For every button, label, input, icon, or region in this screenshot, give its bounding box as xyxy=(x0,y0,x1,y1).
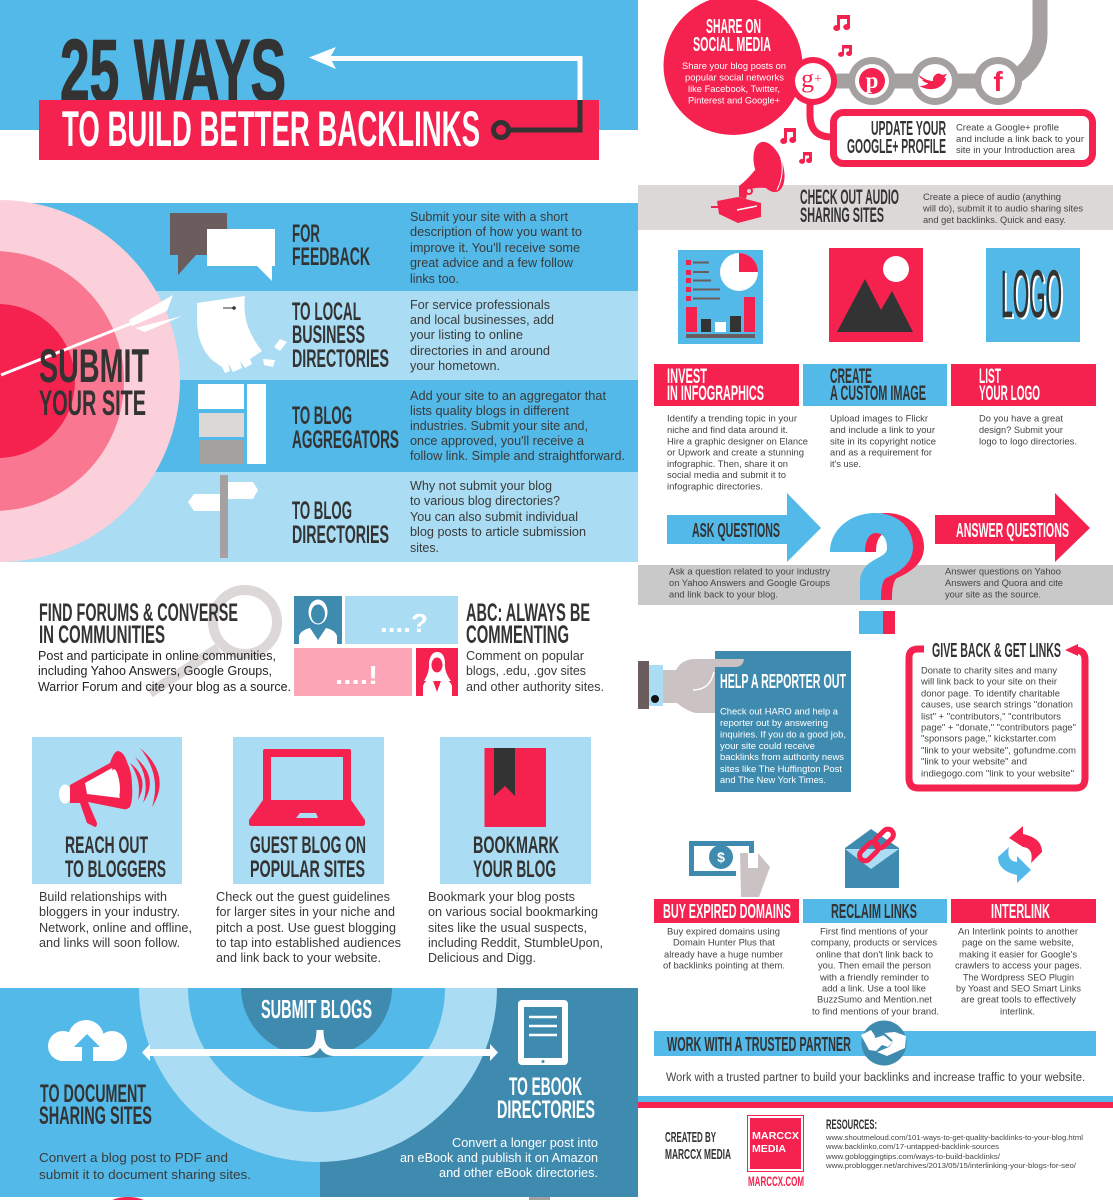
panel: buy expired domains: of backlinks pointing at them. xyxy=(663,960,785,972)
panel: reach out to bloggers: bloggers in your industry. xyxy=(39,904,180,919)
arrow: double brace xyxy=(142,1030,498,1061)
frame with arrow xyxy=(909,644,1085,788)
resources: www.gobloggingtips.com/ways-to-build-backlinks/ xyxy=(825,1152,1001,1161)
icon: facebook: f xyxy=(993,66,1003,97)
row: blog aggregators: AGGREGATORS xyxy=(292,426,399,454)
footer stripes xyxy=(638,1096,1113,1108)
panel: give back and get links: page" + "donate," "contributors page" xyxy=(921,722,1076,734)
icon: pinterest: p xyxy=(866,68,878,93)
icon: megaphone xyxy=(59,748,160,827)
panel: interlink: interlink. xyxy=(1000,1006,1035,1018)
row: local business directories: your hometown. xyxy=(410,358,500,373)
panel: guest blog: POPULAR SITES xyxy=(250,856,365,883)
red circle: Share your blog posts on xyxy=(682,61,786,72)
row: for feedback xyxy=(292,209,582,286)
concentric arcs xyxy=(139,988,497,1162)
panel: give back and get links: indiegogo.com "link to your website" xyxy=(921,768,1074,780)
panel: audio sharing: and get backlinks. Quick and easy. xyxy=(923,215,1066,226)
panel: help a reporter out: backlinks from authority news xyxy=(720,752,844,763)
row: local business directories: TO LOCAL xyxy=(292,298,361,326)
panel: guest blog: for larger sites in your niche and xyxy=(216,904,395,919)
icon: signpost xyxy=(188,475,258,558)
icon: logo tile xyxy=(986,248,1080,342)
title: 25 ways: 25 WAYS xyxy=(60,21,286,120)
panel: help a reporter out: sites like The Huffington Post xyxy=(720,764,842,775)
row: local business directories: For service professionals xyxy=(410,297,550,312)
icon: google plus: + xyxy=(814,72,822,87)
logo: marccx media: MARCCX xyxy=(752,1130,799,1142)
panel: find forums: including Yahoo Answers, Google Groups, xyxy=(38,663,272,678)
panel: bookmark: on various social bookmarking xyxy=(428,904,598,919)
panel: interlink: An Interlink points to another xyxy=(958,926,1078,938)
arrow: hitting target xyxy=(1,295,182,375)
panel: always be commenting: blogs, .edu, .gov sites xyxy=(466,663,586,678)
panel: reclaim links: RECLAIM LINKS xyxy=(831,901,917,923)
panel: reclaim links xyxy=(803,827,947,1018)
logo: marccx media xyxy=(748,1116,804,1189)
speech box: question xyxy=(345,596,458,644)
row: blog aggregators: industries. Submit your site and, xyxy=(410,418,588,433)
panel: guest blog: Check out the guest guidelines xyxy=(216,889,390,904)
panel: guest blog: and link back to your website. xyxy=(216,950,381,965)
icon: envelope with chain xyxy=(845,827,899,888)
panel: guest blog: to tap into established audiences xyxy=(216,935,401,950)
panel: interlink xyxy=(951,826,1096,1018)
panel: submit blogs: an eBook and publish it on Amazon xyxy=(400,1150,598,1165)
panel: answer questions: Answers and Quora and cite xyxy=(945,578,1063,589)
panel: answer questions: Answer questions on Yahoo xyxy=(945,566,1061,578)
icon: infographic sheet xyxy=(678,250,763,344)
row: blog directories: TO BLOG xyxy=(292,497,352,525)
panel: ask questions: Ask a question related to your industry xyxy=(669,566,830,578)
panel: interlink: making it easier for Google's xyxy=(959,950,1077,960)
panel: bookmark: Bookmark your blog posts xyxy=(428,889,575,904)
panel: bookmark: BOOKMARK xyxy=(473,832,559,859)
row: local business directories: directories in and around xyxy=(410,343,550,358)
panel: submit blogs: DIRECTORIES xyxy=(497,1096,595,1124)
icon: cloud upload xyxy=(48,1020,127,1061)
panel: always be commenting xyxy=(466,599,604,694)
panel: reclaim links: add a link. Use a tool like xyxy=(822,984,926,994)
panel: buy expired domains: BUY EXPIRED DOMAINS xyxy=(663,901,791,923)
row: blog directories: DIRECTORIES xyxy=(292,521,389,549)
panel: give back and get links: list" + "contributors," "contributors xyxy=(921,712,1061,722)
panel: invest in infographics: niche and find data around it. xyxy=(667,425,788,436)
panel: guest blog xyxy=(216,737,401,965)
row: for feedback: improve it. You'll receive some xyxy=(410,240,580,255)
panel: always be commenting: COMMENTING xyxy=(466,621,569,649)
icon: refresh arrows xyxy=(998,826,1042,883)
icon: twitter xyxy=(911,57,959,105)
panel: interlink: page on the same website, xyxy=(962,938,1074,948)
resources xyxy=(825,1116,1083,1170)
panel: always be commenting: and other authority sites. xyxy=(466,679,604,694)
row: blog directories: Why not submit your blog xyxy=(410,478,552,493)
panel: invest in infographics: infographic directories. xyxy=(667,482,763,492)
panel: invest in infographics: Hire a graphic designer on Elance xyxy=(667,436,808,448)
icon: tablet xyxy=(518,1000,568,1065)
row: blog directories: You can also submit individual xyxy=(410,509,578,524)
panel: reach out to bloggers: REACH OUT xyxy=(65,832,148,859)
panel: create a custom image xyxy=(803,248,947,470)
panel: audio sharing: will do), submit it to audio sharing sites xyxy=(922,204,1083,214)
icon: aggregator blocks xyxy=(198,384,266,464)
panel: reach out to bloggers: and links will soon follow. xyxy=(39,935,180,950)
row: local business directories: DIRECTORIES xyxy=(292,345,389,373)
panel: give back and get links: "sponsors page," kickstarter.com xyxy=(921,734,1056,744)
row: blog aggregators: Add your site to an aggregator that xyxy=(410,388,606,403)
icon: speech bubbles xyxy=(170,213,275,281)
panel: invest in infographics: Identify a trending topic in your xyxy=(667,414,797,424)
panel: reach out to bloggers: Network, online and offline, xyxy=(39,920,192,935)
panel: submit your site xyxy=(0,200,638,562)
panel: guest blog: GUEST BLOG ON xyxy=(250,832,366,859)
row: blog directories: blog posts to article submission xyxy=(410,524,586,539)
panel: invest in infographics: social media and submit it to xyxy=(667,470,786,481)
row: for feedback: FOR xyxy=(292,220,320,248)
panel: submit blogs: Convert a longer post into xyxy=(452,1135,598,1150)
row: blog aggregators xyxy=(292,388,625,463)
icon: gramophone xyxy=(711,138,790,223)
panel: update your google+ profile: GOOGLE+ PROFILE xyxy=(847,136,946,158)
panel: interlink: are great tools to effectively xyxy=(961,994,1076,1006)
panel: buy expired domains xyxy=(654,844,799,972)
panel: find forums: FIND FORUMS & CONVERSE xyxy=(39,599,238,627)
red circle: like Facebook, Twitter, xyxy=(688,84,780,95)
row: local business directories: your listing to online xyxy=(410,327,523,342)
credits: CREATED BY xyxy=(665,1129,716,1146)
panel: audio sharing: Create a piece of audio (anything xyxy=(923,192,1061,203)
icon: pinned paper xyxy=(197,296,287,373)
logo: marccx media: MARCCX.COM xyxy=(748,1173,804,1189)
panel: bookmark: YOUR BLOG xyxy=(473,856,556,883)
panel: bookmark xyxy=(428,737,603,965)
arrow: title link xyxy=(309,47,580,138)
panel: ask questions: and link back to your blog. xyxy=(669,590,778,600)
panel: guest blog: pitch a post. Use guest blogging xyxy=(216,920,396,935)
panel: update your google+ profile: Create a Google+ profile xyxy=(956,122,1059,134)
panel: trusted partner: WORK WITH A TRUSTED PARTNER xyxy=(667,1034,851,1056)
row: blog aggregators: follow link. Simple and straightforward. xyxy=(410,448,625,463)
panel: update your google+ profile xyxy=(834,112,1092,164)
icon: google plus xyxy=(789,57,837,105)
panel: help a reporter out: and The New York Times. xyxy=(720,775,826,786)
icon: magnifying glass xyxy=(150,590,277,693)
panel: give back and get links: causes, use search strings "donation xyxy=(921,700,1073,710)
panel: invest in infographics: infographic. Then, share it on xyxy=(667,459,788,470)
row: local business directories xyxy=(292,297,554,373)
speech box: answer xyxy=(294,648,412,696)
icon: picture xyxy=(829,248,923,342)
panel: bookmark: Delicious and Digg. xyxy=(428,950,536,965)
arrow: answer xyxy=(935,493,1090,562)
row: blog aggregators: lists quality blogs in different xyxy=(410,403,569,418)
panel: reach out to bloggers: TO BLOGGERS xyxy=(65,856,166,883)
title banner: TO BUILD BETTER BACKLINKS xyxy=(62,101,480,157)
panel: always be commenting: Comment on popular xyxy=(466,648,585,663)
credits: MARCCX MEDIA xyxy=(665,1146,731,1163)
band: question text background xyxy=(638,565,1113,605)
icon: money and hand xyxy=(692,844,770,897)
panel: interlink: INTERLINK xyxy=(991,901,1050,923)
panel: submit blogs: submit it to document sharing sites. xyxy=(39,1167,251,1182)
red circle xyxy=(664,0,802,135)
panel: reclaim links: online that don't link back to xyxy=(816,950,933,960)
panel: give back and get links xyxy=(909,640,1085,788)
panel: invest in infographics: or Upwork and create a stunning xyxy=(667,448,804,458)
row: for feedback: great advice and a few follow xyxy=(410,255,574,270)
panel: create a custom image: Upload images to Flickr xyxy=(830,414,928,424)
panel: ask questions xyxy=(667,493,830,600)
panel: find forums: Post and participate in online communities, xyxy=(38,648,276,663)
icon: pinterest xyxy=(848,57,896,105)
panel: bookmark: sites like the usual suspects, xyxy=(428,920,587,935)
panel: always be commenting: ABC: ALWAYS BE xyxy=(466,599,590,627)
icon: google plus: g xyxy=(801,64,814,93)
panel: audio sharing: CHECK OUT AUDIO xyxy=(800,186,899,209)
panel: submit blogs: and other eBook directories. xyxy=(439,1165,598,1180)
panel: give back and get links: donor page. To identify charitable xyxy=(921,688,1060,700)
panel: create a custom image: and include a link to your xyxy=(830,425,935,436)
panel: reach out to bloggers xyxy=(32,737,192,950)
row: blog directories xyxy=(292,478,586,555)
logo: marccx media: MEDIA xyxy=(752,1143,786,1155)
heading: submit your site xyxy=(39,339,149,423)
panel: list your logo: LIST xyxy=(979,365,1001,388)
connector: red profile line xyxy=(810,100,832,137)
panel: reclaim links: company, products or services xyxy=(811,938,937,948)
icon: pointing hand xyxy=(638,659,744,713)
panel: reclaim links: with a friendly reminder to xyxy=(819,972,929,984)
panel: title header xyxy=(0,0,638,160)
heading: submit your site: YOUR SITE xyxy=(39,384,146,423)
panel: find forums: Warrior Forum and cite your blog as a source. xyxy=(38,679,291,694)
panel: trusted partner xyxy=(654,1020,1096,1084)
panel: update your google+ profile: UPDATE YOUR xyxy=(871,118,946,140)
row: for feedback: Submit your site with a short xyxy=(410,209,568,224)
panel: create a custom image: site in its copyright notice xyxy=(830,436,936,448)
panel: create a custom image: A CUSTOM IMAGE xyxy=(830,382,926,405)
panel: bookmark: including Reddit, StumbleUpon, xyxy=(428,935,603,950)
row: for feedback: FEEDBACK xyxy=(292,243,370,271)
panel: reclaim links: to find mentions of your brand. xyxy=(812,1006,939,1018)
panel: invest in infographics: IN INFOGRAPHICS xyxy=(667,382,764,405)
panel: list your logo xyxy=(951,248,1096,448)
red circle: SHARE ON xyxy=(706,16,761,38)
panel: audio sharing xyxy=(638,138,1113,230)
panel: reach out to bloggers: Build relationships with xyxy=(39,889,167,904)
row: blog aggregators: TO BLOG xyxy=(292,402,352,430)
heading: submit your site: SUBMIT xyxy=(39,339,149,392)
panel: reclaim links: First find mentions of your xyxy=(820,926,928,938)
panel: buy expired domains: already have a huge number xyxy=(664,950,783,960)
panel: submit blogs: SUBMIT BLOGS xyxy=(261,994,372,1024)
icon: handshake xyxy=(861,1020,906,1066)
panel: list your logo: logo to logo directories. xyxy=(979,436,1077,448)
icon: man avatar xyxy=(294,596,342,644)
credits xyxy=(665,1129,731,1163)
panel: reclaim links: you. Then email the person xyxy=(818,960,931,972)
panel: audio sharing: SHARING SITES xyxy=(800,204,884,227)
red circle: Pinterest and Google+ xyxy=(688,96,780,106)
panel: interlink: The Wordpress SEO Plugin xyxy=(963,972,1074,984)
panel: answer questions xyxy=(935,493,1090,600)
panel: update your google+ profile: site in your Introduction area xyxy=(956,145,1076,156)
panel: help a reporter out: Check out HARO and help a xyxy=(720,706,839,718)
title banner xyxy=(39,100,599,160)
panel: list your logo: YOUR LOGO xyxy=(979,382,1040,405)
row: blog aggregators: once approved, you'll receive a xyxy=(410,433,585,448)
speech box: question: ....? xyxy=(380,608,428,638)
panel: ask questions: ASK QUESTIONS xyxy=(692,520,780,542)
panel: create a custom image: it's use. xyxy=(830,459,861,470)
panel: answer questions: your site as the source. xyxy=(945,590,1041,600)
panel: help a reporter out: your site could receive xyxy=(720,741,815,752)
resources: RESOURCES: xyxy=(826,1116,877,1132)
icon: question mark xyxy=(830,513,924,634)
icon: woman avatar xyxy=(416,648,458,696)
panel: submit blogs: SHARING SITES xyxy=(39,1102,152,1130)
panel: create a custom image: and as a requirement for xyxy=(830,448,932,458)
arrow: ask xyxy=(667,493,821,562)
panel: buy expired domains: Buy expired domains using xyxy=(667,926,780,938)
panel: submit blogs: TO DOCUMENT xyxy=(40,1080,146,1108)
resources: www.shoutmeloud.com/101-ways-to-get-quality-backlinks-to-your-blog.html xyxy=(825,1133,1083,1142)
target xyxy=(0,200,180,562)
row: blog directories: sites. xyxy=(410,540,439,555)
panel: submit blogs: Convert a blog post to PDF and xyxy=(39,1150,228,1165)
panel: list your logo: Do you have a great xyxy=(979,414,1063,424)
icon: money and hand: $ xyxy=(717,849,725,865)
panel: help a reporter out: inquiries. If you do a good job, xyxy=(720,730,846,740)
icon: music notes xyxy=(780,15,852,164)
panel: buy expired domains: Domain Hunter Plus that xyxy=(673,938,775,948)
panel: interlink: crawlers to access your pages. xyxy=(955,960,1082,972)
panel: find forums: IN COMMUNITIES xyxy=(39,621,165,649)
panel: invest in infographics: INVEST xyxy=(667,365,707,388)
icon: facebook xyxy=(974,57,1022,105)
panel: find forums xyxy=(38,590,291,694)
panel: give back and get links: "link to your website", gofundme.com xyxy=(921,746,1076,756)
resources: www.backlinko.com/17-untapped-backlink-sources xyxy=(825,1142,999,1151)
row: for feedback: description of how you want to xyxy=(410,224,582,239)
panel: help a reporter out: HELP A REPORTER OUT xyxy=(720,671,846,693)
panel: help a reporter out: reporter out by answering xyxy=(720,718,828,729)
panel: interlink: by Yoast and SEO Smart Links xyxy=(956,984,1081,994)
panel: help a reporter out xyxy=(638,651,851,792)
red circle: SOCIAL MEDIA xyxy=(693,34,771,56)
panel: invest in infographics xyxy=(654,250,808,492)
panel: share on social media xyxy=(664,0,1040,164)
panel: list your logo: design? Submit your xyxy=(979,425,1063,436)
row: for feedback: links too. xyxy=(410,271,459,286)
row: blog directories: to various blog directories? xyxy=(410,493,560,508)
chat graphic xyxy=(294,596,458,696)
panel: give back and get links: Donate to charity sites and many xyxy=(921,666,1057,676)
panel: submit blogs xyxy=(0,988,638,1197)
panel: create a custom image: CREATE xyxy=(830,365,872,388)
panel: reclaim links: BuzzSumo and Mention.net xyxy=(817,994,932,1006)
resources: www.problogger.net/archives/2013/05/15/interlinking-your-blogs-for-seo/ xyxy=(825,1161,1077,1170)
panel: trusted partner: Work with a trusted partner to build your backlinks and increase traffic to your website. xyxy=(666,1072,1085,1084)
row: local business directories: and local businesses, add xyxy=(410,312,554,327)
panel: ask questions: on Yahoo Answers and Google Groups xyxy=(669,578,830,589)
panel: give back and get links: "link to your website" and xyxy=(921,756,1027,768)
panel: give back and get links: will link back to your site on their xyxy=(920,676,1057,688)
icon: laptop xyxy=(249,749,365,826)
panel: submit blogs: TO EBOOK xyxy=(509,1073,582,1101)
row: local business directories: BUSINESS xyxy=(292,321,365,349)
speech box: answer: ....! xyxy=(335,660,378,690)
red circle: popular social networks xyxy=(685,72,784,84)
connector: grey social line xyxy=(820,0,1040,81)
panel: update your google+ profile: and include a link back to your xyxy=(956,134,1084,145)
icon: bookmarked book xyxy=(484,748,546,827)
